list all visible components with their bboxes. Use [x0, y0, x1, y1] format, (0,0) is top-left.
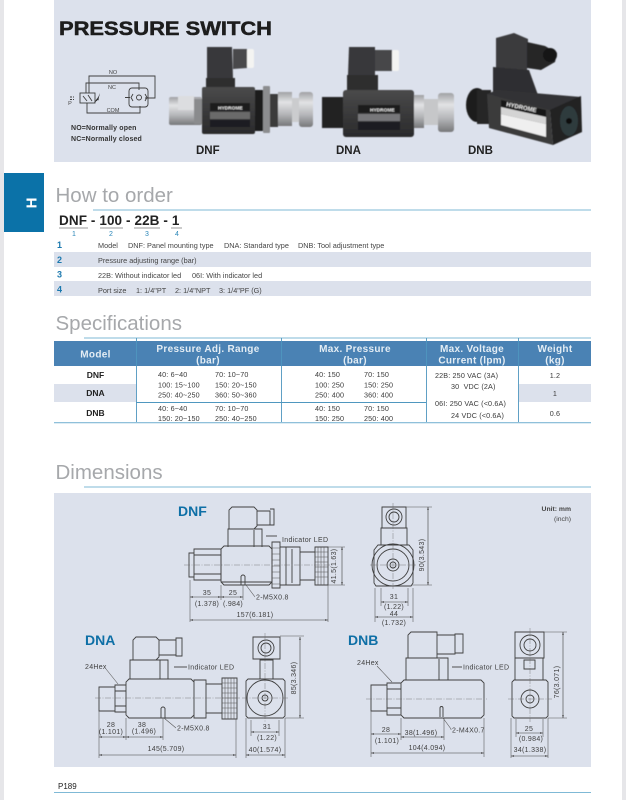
label: DNF: DNF	[178, 503, 207, 519]
row 3: indicator: 06I: With indicator led	[192, 271, 262, 280]
table header: Max. Pressure	[319, 344, 391, 355]
unit note	[542, 506, 571, 523]
dimensions: DNA end view: 31	[263, 724, 271, 731]
row 3: indicator: 22B: Without indicator led	[98, 271, 181, 280]
callout: DNA labels	[85, 664, 234, 684]
pressure ranges: 150: 20~150	[158, 414, 200, 423]
dimensions: DNB side view: 28	[382, 727, 390, 734]
title: PRESSURE SWITCH	[59, 19, 272, 40]
drawing: DNB side view	[366, 632, 487, 718]
dimensions: DNF side view: 157(6.181)	[237, 612, 273, 619]
row 2: pressure range	[57, 255, 197, 265]
dimensions: DNF end view: 90(3.543)	[419, 539, 426, 571]
label: DNA: DNA	[85, 632, 115, 648]
model names: DNB	[86, 408, 105, 418]
order code	[59, 213, 182, 238]
dimensions: DNB end view: (0.984)	[519, 736, 543, 743]
label: DNB: DNB	[348, 632, 378, 648]
row 4: port size: 3: 1/4"PF (G)	[219, 286, 262, 295]
legend: NO and NC	[71, 125, 142, 143]
model names: DNA	[86, 388, 105, 398]
row 1: model: DNA: Standard type	[224, 241, 289, 250]
heading: dimensions: Dimensions	[56, 461, 163, 484]
dimensions: DNF end view: (1.732)	[382, 620, 406, 627]
max pressures: 40: 150	[315, 370, 340, 379]
dimensions: DNB end view	[511, 632, 567, 758]
dimensions: DNF side view: 25	[229, 590, 237, 597]
model names: DNF	[87, 370, 104, 380]
drawing: DNF side view	[184, 507, 332, 588]
model labels	[196, 145, 493, 157]
dimensions: DNA side view: 38	[138, 722, 146, 729]
order code: 4	[175, 231, 179, 238]
dimensions: DNA side view: (1.101)	[99, 729, 123, 736]
row 4: port size: 1: 1/4"PT	[136, 286, 167, 295]
panel: dimensions	[54, 493, 591, 767]
pressure ranges: 360: 50~360	[215, 390, 257, 400]
voltage and current: 30 VDC (2A)	[451, 382, 496, 391]
circuit symbol diagram: COM	[107, 108, 120, 114]
row 1: model: DNF: Panel mounting type	[128, 241, 214, 250]
max pressures: 250: 400	[315, 390, 344, 400]
dimensions: DNF end view	[375, 507, 432, 627]
max pressures: 40: 150	[315, 404, 340, 413]
table header	[54, 341, 591, 366]
heading: how to order: How to order	[56, 184, 173, 207]
max pressures: 150: 250	[315, 414, 344, 423]
pressure ranges: 70: 10~70	[215, 404, 249, 413]
dimensions: DNF end view: (1.22)	[384, 604, 404, 611]
order code: 2	[109, 231, 113, 238]
max pressures: 70: 150	[364, 370, 389, 379]
unit note: (inch)	[554, 516, 571, 523]
dimensions: DNB end view: 76(3.071)	[554, 666, 561, 698]
table header: (bar)	[196, 356, 220, 366]
voltage and current: 24 VDC (<0.6A)	[451, 411, 504, 420]
table header: (kg)	[545, 356, 565, 366]
max pressures: 100: 250	[315, 380, 344, 390]
callout: DNF indicator LED: Indicator LED	[282, 537, 328, 544]
row 3: indicator	[57, 270, 262, 280]
order code: 1	[72, 231, 76, 238]
photo: DNB switch: HYDROME	[506, 102, 537, 114]
callout: DNB labels	[357, 660, 509, 682]
pressure ranges	[158, 370, 257, 423]
photo: DNF switch	[169, 47, 313, 134]
table header: Current (lpm)	[438, 356, 506, 366]
row 2: pressure range: Pressure adjusting range (bar)	[98, 256, 197, 265]
row 1: model: DNB: Tool adjustment type	[298, 241, 384, 250]
table: specifications	[54, 338, 591, 423]
dimensions: DNB side view: 38(1.496)	[405, 730, 437, 737]
dimensions: DNA side view	[99, 711, 236, 758]
order code: 3	[145, 231, 149, 238]
drawing: DNA side view	[95, 637, 240, 719]
dimensions: DNA end view: (1.22)	[257, 735, 277, 742]
dimensions: DNB side view	[371, 711, 485, 757]
legend: NO and NC: NO=Normally open	[71, 125, 137, 132]
order code: DNF - 100 - 22B - 1	[59, 213, 180, 228]
dimensions: DNA end view: 40(1.574)	[249, 747, 281, 754]
voltage and current: 06I: 250 VAC (<0.6A)	[435, 399, 506, 408]
dimensions: DNA side view: 2-M5X0.8	[177, 726, 210, 732]
model labels: DNA	[336, 145, 361, 157]
side tab: H	[24, 198, 40, 208]
circuit symbol diagram	[68, 70, 155, 114]
circuit symbol diagram: P	[68, 101, 72, 107]
model labels: DNB	[468, 145, 493, 157]
row 4: port size	[57, 284, 262, 295]
voltage and current	[435, 371, 506, 420]
weights: 1.2	[550, 371, 560, 380]
dimensions: DNF side view: (.984)	[223, 601, 243, 608]
table header: Model	[80, 350, 111, 360]
row 1: model: Model	[98, 241, 118, 250]
dimensions: DNF side view: 35	[203, 590, 211, 597]
photo: DNB switch	[466, 33, 582, 145]
circuit symbol diagram: NC	[108, 85, 116, 91]
dimensions: DNB side view: 2-M4X0.7	[452, 728, 485, 734]
max pressures: 360: 400	[364, 390, 393, 400]
row 3: indicator: 3	[57, 270, 62, 280]
table header: Max. Voltage	[440, 344, 504, 355]
circuit symbol diagram: NO	[109, 70, 118, 76]
callout: DNA labels: 24Hex	[85, 664, 107, 671]
heading: specifications: Specifications	[56, 312, 182, 335]
dimensions: DNB side view: 104(4.094)	[409, 745, 445, 752]
footer rule	[54, 792, 591, 793]
max pressures: 250: 400	[364, 414, 393, 423]
drawing: DNA end view	[242, 633, 289, 722]
dimensions: DNB side view: (1.101)	[375, 738, 399, 745]
dimensions: DNA side view: 145(5.709)	[148, 746, 184, 753]
dimensions: DNF side view: (1.378)	[195, 601, 219, 608]
drawing: DNF end view	[370, 503, 417, 590]
dimensions: DNF side view: 2-M5X0.8	[256, 594, 289, 602]
row 4: port size: 4	[57, 284, 62, 294]
dimensions: DNB end view: 25	[525, 726, 533, 733]
max pressures	[315, 370, 393, 423]
dimensions: DNF end view: 31	[390, 594, 398, 601]
callout: DNB labels: 24Hex	[357, 660, 379, 667]
dimensions: DNA end view	[246, 636, 304, 758]
table header: Pressure Adj. Range	[156, 344, 260, 355]
dimensions: DNF side view	[190, 547, 345, 622]
table: ordering options	[54, 240, 591, 296]
row 1: model	[57, 240, 384, 250]
pressure ranges: 70: 10~70	[215, 370, 249, 379]
photo: DNA switch	[322, 47, 454, 137]
weights: 0.6	[550, 409, 560, 418]
pressure ranges: 100: 15~100	[158, 380, 200, 390]
photo: DNA switch: HYDROME	[370, 108, 395, 114]
callout: DNF indicator LED	[266, 536, 328, 544]
voltage and current: 22B: 250 VAC (3A)	[435, 371, 498, 380]
max pressures: 70: 150	[364, 404, 389, 413]
table header: Weight	[538, 344, 573, 355]
row 2: pressure range: 2	[57, 255, 62, 265]
pressure ranges: 40: 6~40	[158, 404, 187, 413]
pressure ranges: 150: 20~150	[215, 380, 257, 390]
dimensions: DNA side view: (1.496)	[132, 728, 156, 736]
row 4: port size: 2: 1/4"NPT	[175, 286, 211, 295]
callout: DNB labels: Indicator LED	[463, 664, 509, 672]
row 4: port size: Port size	[98, 286, 126, 295]
table header: (bar)	[343, 356, 367, 366]
dimensions: DNB end view: 34(1.338)	[514, 747, 546, 754]
legend: NO and NC: NC=Normally closed	[71, 136, 142, 143]
callout: DNA labels: Indicator LED	[188, 664, 234, 672]
photo: DNF switch: HYDROME	[218, 106, 243, 112]
weights	[550, 371, 560, 418]
page number: P189	[58, 782, 77, 791]
unit note: Unit: mm	[542, 506, 571, 513]
dimensions: DNF side view: 41.5(1.63)	[331, 549, 338, 583]
panel: product header	[54, 0, 591, 162]
dimensions: DNF end view: 44	[390, 611, 398, 618]
model labels: DNF	[196, 145, 220, 157]
model names	[86, 370, 105, 418]
dimensions: DNA side view: 28	[107, 722, 115, 729]
drawing: DNB end view	[508, 628, 552, 722]
row 1: model: 1	[57, 240, 62, 250]
pressure ranges: 250: 40~250	[158, 390, 200, 400]
pressure ranges: 40: 6~40	[158, 370, 187, 379]
dimensions: DNA end view: 85(3.346)	[291, 662, 298, 694]
max pressures: 150: 250	[364, 380, 393, 390]
side tab	[4, 173, 44, 232]
weights: 1	[553, 389, 557, 398]
pressure ranges: 250: 40~250	[215, 414, 257, 423]
